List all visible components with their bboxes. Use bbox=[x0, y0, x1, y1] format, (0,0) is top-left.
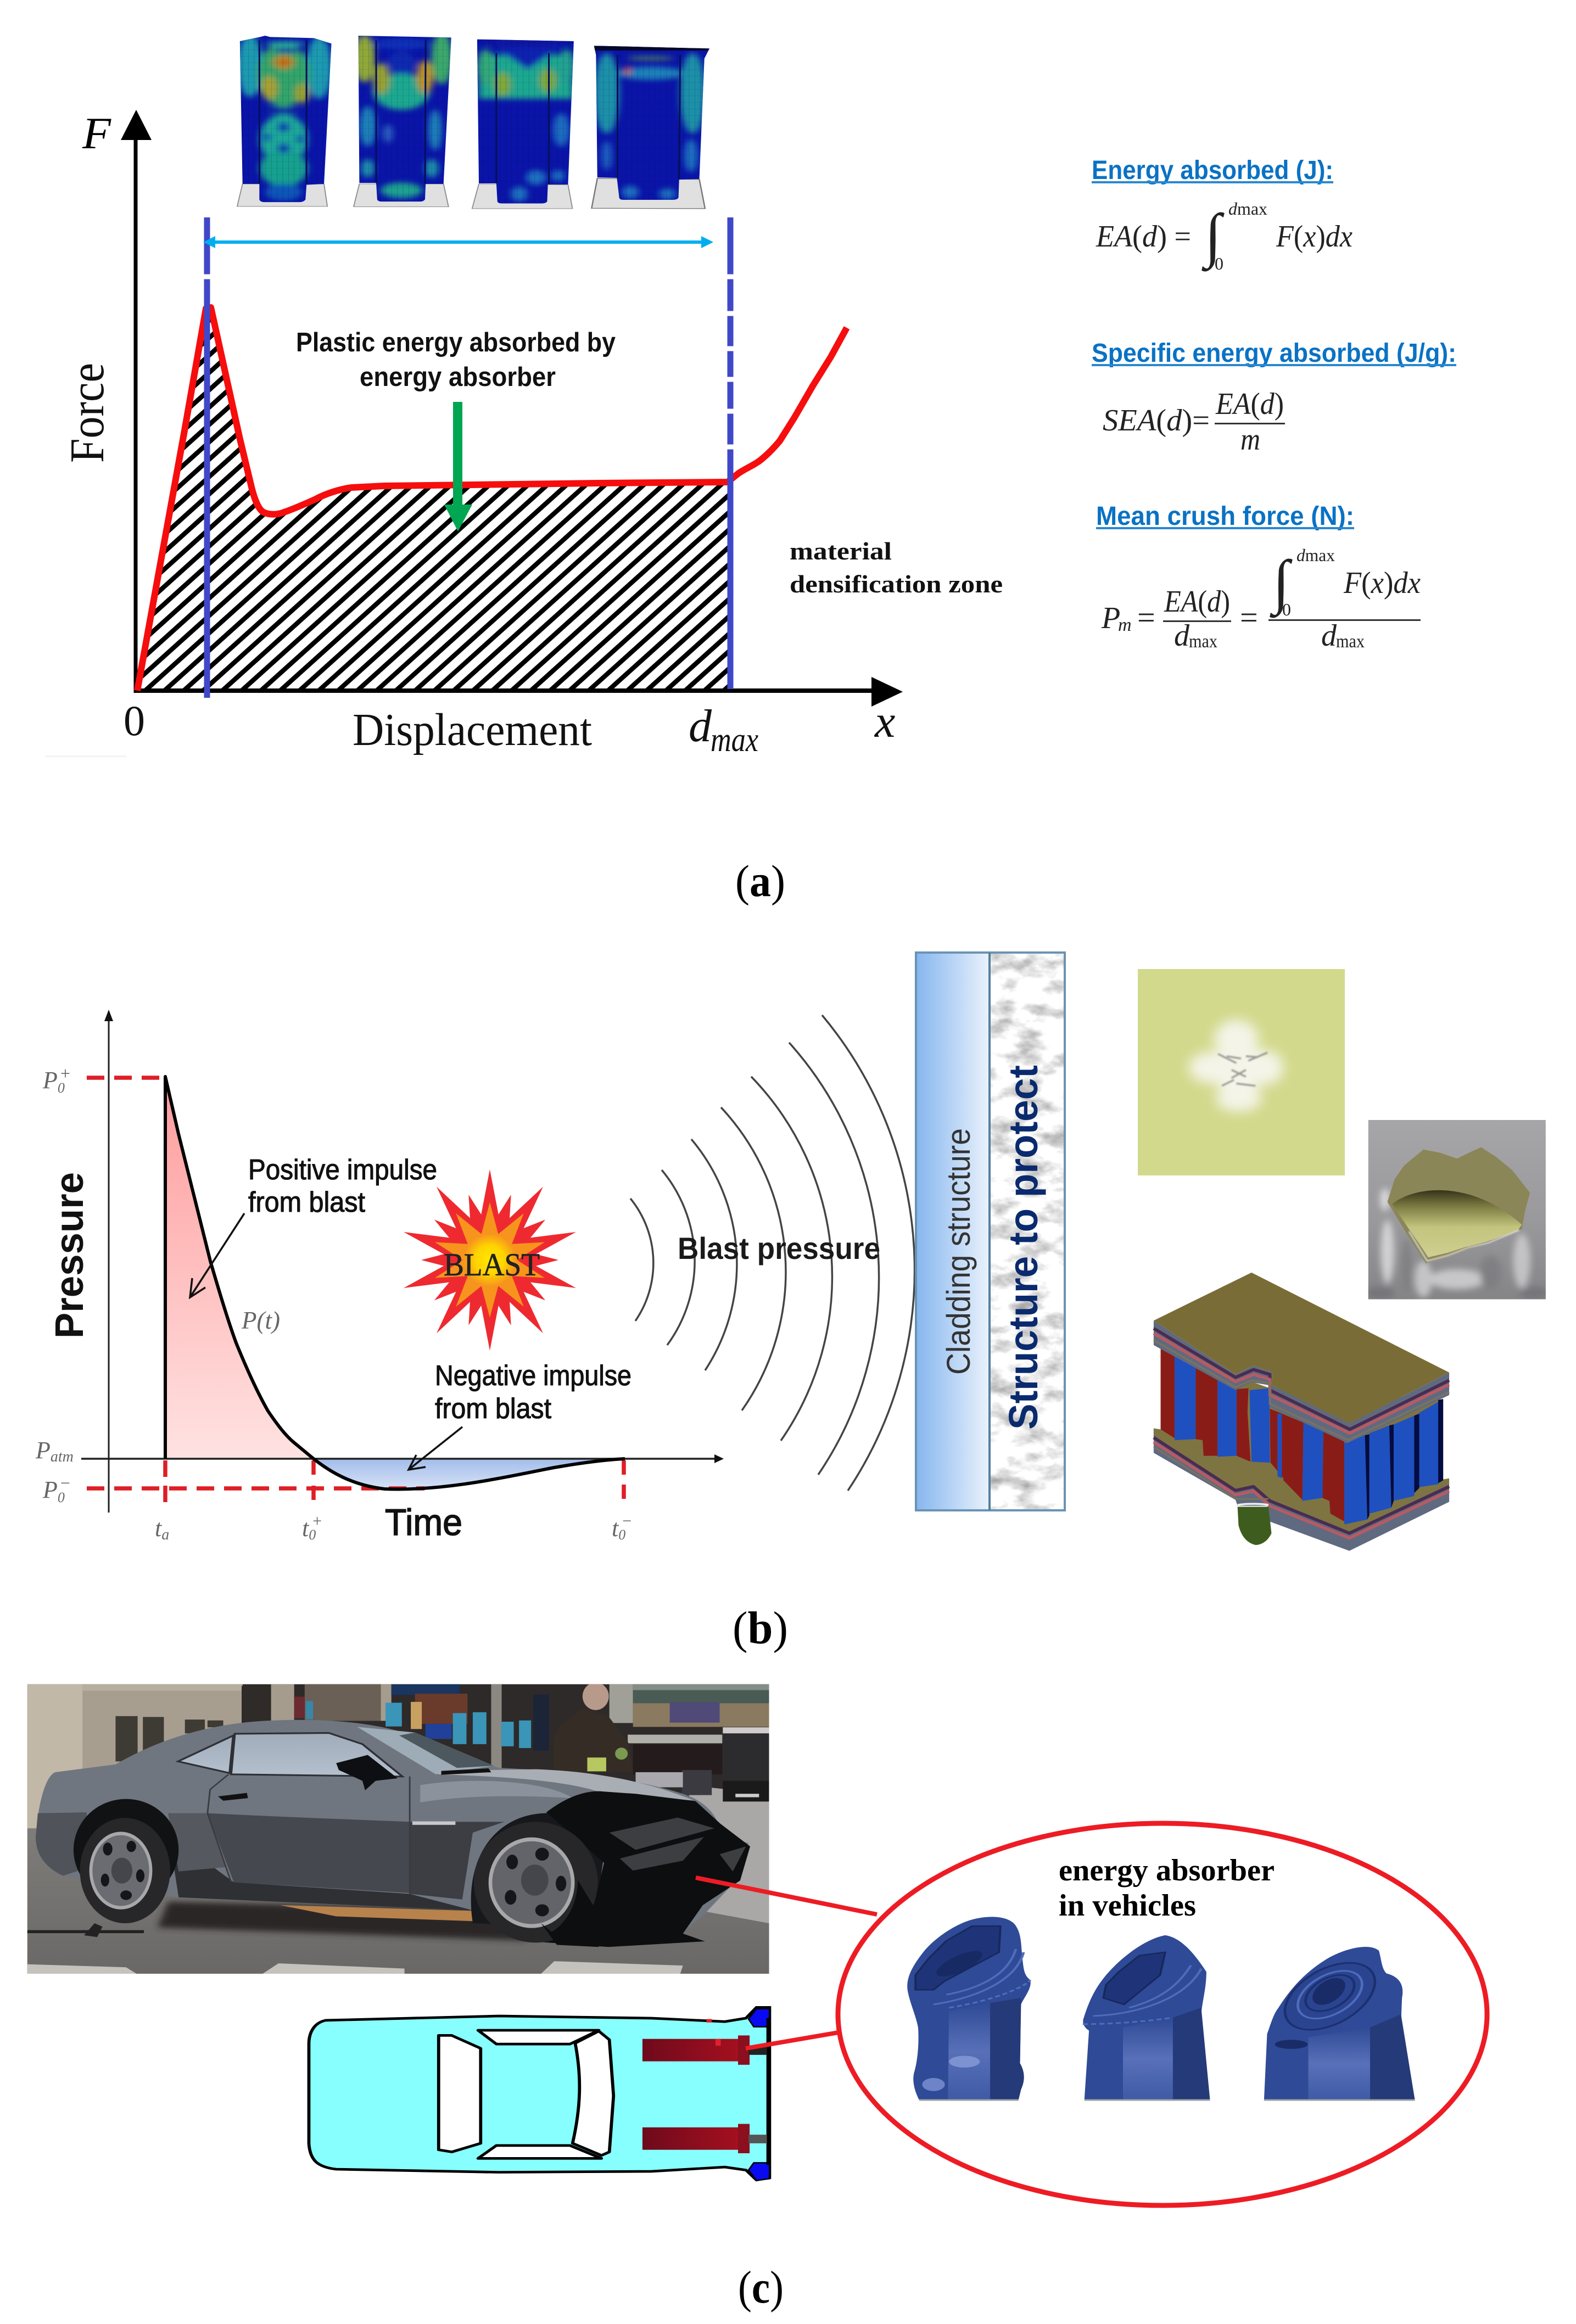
tube 4 bbox=[590, 44, 714, 209]
shadow and reflection bbox=[158, 1902, 526, 1940]
rear wheel bbox=[80, 1818, 170, 1923]
axis label dmax: d bbox=[689, 701, 712, 752]
label BLAST: BLAST bbox=[444, 1247, 540, 1283]
x axis with arrow bbox=[134, 677, 903, 707]
icon: blast star bbox=[400, 1169, 580, 1351]
panel: formulas bbox=[1092, 156, 1456, 653]
city background bbox=[385, 1684, 769, 1774]
time labels bbox=[155, 1512, 632, 1543]
annotation: positive impulse: Positive impulse bbox=[248, 1154, 437, 1186]
wheel arches bbox=[74, 1799, 178, 1901]
faint scan line bbox=[45, 755, 126, 757]
pressure labels: + bbox=[59, 1063, 71, 1083]
formula: mean crush force bbox=[1096, 502, 1421, 653]
zoom ellipse bbox=[838, 1823, 1487, 2205]
car top view diagram bbox=[309, 2007, 770, 2180]
roof bbox=[1154, 1273, 1449, 1424]
absorber 3 bbox=[1264, 1947, 1415, 2100]
road bbox=[27, 1828, 769, 1974]
formula: specific energy absorbed: Specific energy absorbed (J/g): bbox=[1092, 339, 1456, 368]
arrow: negative impulse bbox=[409, 1427, 462, 1470]
axis label dmax: max bbox=[711, 721, 758, 759]
pressure axis bbox=[104, 1010, 113, 1513]
tube 2 bbox=[354, 33, 455, 207]
label: cladding structure: Cladding structure bbox=[940, 1128, 977, 1375]
panel: force-displacement chart (a) bbox=[45, 33, 1003, 759]
photo: impacted plate bbox=[1138, 969, 1345, 1175]
annotation: plastic energy: Plastic energy absorbed by bbox=[296, 328, 616, 357]
formula: mean crush force: = bbox=[1137, 600, 1155, 635]
formula: mean crush force: ∫ bbox=[1270, 548, 1293, 618]
red dashed reference lines bbox=[87, 1078, 624, 1509]
force-displacement curve bbox=[137, 307, 847, 691]
annotation: plastic energy bbox=[296, 328, 616, 392]
label: energy absorber in vehicles bbox=[1059, 1853, 1275, 1923]
axis label dmax bbox=[689, 701, 758, 759]
blast pressure wave arcs bbox=[630, 1015, 915, 1491]
absorber 1 bbox=[907, 1917, 1031, 2100]
backing behind walls bbox=[1154, 1349, 1443, 1537]
axis tick 0: 0 bbox=[124, 697, 145, 744]
annotation: material densification zone: densification zone bbox=[790, 570, 1003, 598]
time labels: t bbox=[302, 1515, 309, 1542]
formula: specific energy absorbed: EA(d) bbox=[1215, 387, 1284, 421]
time labels: a bbox=[161, 1526, 169, 1543]
door seams bbox=[208, 1774, 410, 1894]
axis label x: x bbox=[874, 696, 895, 747]
windows bbox=[178, 1727, 494, 1801]
curve label P(t): P(t) bbox=[241, 1306, 280, 1334]
time labels: t bbox=[155, 1515, 161, 1542]
tube 3 bbox=[472, 37, 580, 209]
torn bumper over wheel bbox=[541, 1880, 599, 1947]
formula: mean crush force: d bbox=[1174, 619, 1190, 653]
formula: mean crush force: Mean crush force (N): bbox=[1096, 502, 1354, 531]
pressure labels: − bbox=[59, 1473, 71, 1493]
photo: torn metal plate bbox=[1366, 1120, 1548, 1300]
formula: energy absorbed: EA(d) = bbox=[1096, 220, 1191, 254]
y axis with arrow bbox=[121, 110, 152, 693]
positive impulse area bbox=[165, 1078, 314, 1459]
formula: mean crush force: dmax bbox=[1296, 545, 1335, 565]
photo: crashed car bbox=[27, 1682, 769, 1974]
energy absorbers bbox=[642, 2019, 767, 2153]
formula: mean crush force: P bbox=[1101, 601, 1120, 635]
windows bbox=[439, 2030, 613, 2158]
front wheel bbox=[474, 1822, 598, 1942]
formula: specific energy absorbed: m bbox=[1240, 423, 1260, 457]
axis label Time: Time bbox=[385, 1502, 462, 1543]
FE model of sandwich structure bbox=[1154, 1273, 1449, 1551]
dark lower panels bbox=[36, 1812, 504, 1910]
time labels: + bbox=[311, 1512, 322, 1530]
pressure labels: P bbox=[43, 1476, 58, 1503]
pressure-time curve bbox=[165, 1077, 625, 1489]
formula: mean crush force: max bbox=[1189, 631, 1217, 652]
formula: energy absorbed: Energy absorbed (J): bbox=[1092, 156, 1333, 185]
pressure labels bbox=[35, 1063, 74, 1505]
formula: energy absorbed bbox=[1092, 156, 1353, 273]
pressure labels: 0 bbox=[58, 1489, 65, 1505]
upper face sheet bands bbox=[1154, 1320, 1449, 1443]
lower slab and floor bbox=[1154, 1429, 1449, 1551]
body bbox=[309, 2007, 769, 2180]
crushed tube simulation images bbox=[233, 33, 714, 209]
pressure labels: atm bbox=[51, 1448, 74, 1465]
projectile bbox=[1238, 1504, 1271, 1545]
formula: mean crush force: 0 bbox=[1282, 600, 1291, 619]
wall panels bbox=[1161, 1349, 1344, 1521]
pressure labels: P bbox=[36, 1437, 51, 1464]
formula: energy absorbed: ∫ bbox=[1201, 201, 1225, 272]
caption (a): (a) bbox=[735, 856, 785, 906]
time labels: 0 bbox=[618, 1527, 625, 1543]
formula: specific energy absorbed bbox=[1092, 339, 1456, 457]
formula: energy absorbed: F(x)dx bbox=[1276, 220, 1353, 254]
car body bbox=[36, 1720, 748, 1945]
time labels: t bbox=[612, 1515, 618, 1542]
cladding structure panel bbox=[916, 953, 1065, 1510]
truck and traffic bbox=[635, 1727, 769, 1801]
axis label Pressure: Pressure bbox=[48, 1172, 92, 1339]
axis label F: F bbox=[82, 108, 111, 158]
label: energy absorber in vehicles: energy absorber bbox=[1059, 1853, 1275, 1888]
axis label Force: Force bbox=[61, 363, 114, 463]
green arrow bbox=[444, 402, 472, 531]
bumper corners bbox=[748, 2009, 769, 2180]
panel: vehicle crash (c) bbox=[27, 1682, 1487, 2205]
absorber 2 bbox=[1083, 1935, 1210, 2100]
annotation: plastic energy: energy absorber bbox=[360, 362, 556, 392]
hood and fender highlight bbox=[412, 1768, 694, 1825]
annotation: material densification zone: material bbox=[790, 537, 892, 565]
annotation: negative impulse: Negative impulse bbox=[435, 1360, 631, 1392]
formula: mean crush force: max bbox=[1336, 631, 1365, 652]
formula: mean crush force: EA(d) bbox=[1164, 585, 1230, 619]
formula: mean crush force: d bbox=[1321, 619, 1337, 653]
formula: mean crush force: m bbox=[1118, 615, 1132, 635]
caption (b): (b) bbox=[733, 1603, 788, 1654]
annotation: negative impulse bbox=[435, 1360, 631, 1425]
dashed limit lines bbox=[203, 217, 734, 698]
crushed absorbers bbox=[907, 1917, 1415, 2101]
crosswalk bbox=[27, 1961, 683, 1974]
formula: energy absorbed: 0 bbox=[1215, 254, 1223, 273]
label: structure to protect: Structure to protect bbox=[1001, 1065, 1046, 1430]
label Blast pressure: Blast pressure bbox=[678, 1231, 880, 1265]
annotation: negative impulse: from blast bbox=[435, 1393, 552, 1425]
caption (c): (c) bbox=[738, 2262, 784, 2313]
firefighter bbox=[554, 1682, 633, 1772]
formula: mean crush force: = bbox=[1240, 600, 1258, 635]
panel: blast pressure chart (b) bbox=[35, 953, 1548, 1551]
time axis bbox=[81, 1454, 724, 1463]
formula: specific energy absorbed: SEA(d)= bbox=[1103, 404, 1210, 438]
formula: mean crush force: F(x)dx bbox=[1343, 566, 1421, 600]
building left bbox=[27, 1684, 392, 1835]
arrow: positive impulse bbox=[190, 1213, 244, 1297]
pressure labels: 0 bbox=[58, 1080, 65, 1096]
damaged front bbox=[531, 1791, 750, 1947]
annotation: positive impulse: from blast bbox=[248, 1186, 366, 1218]
label: energy absorber in vehicles: in vehicles bbox=[1059, 1889, 1196, 1923]
annotation: positive impulse bbox=[248, 1154, 437, 1218]
time labels: 0 bbox=[309, 1527, 316, 1543]
cyan double arrow bbox=[203, 236, 713, 248]
negative impulse area bbox=[314, 1459, 625, 1489]
formula: energy absorbed: dmax bbox=[1228, 199, 1267, 219]
pressure labels: P bbox=[43, 1067, 58, 1094]
tube 1 bbox=[236, 36, 332, 206]
axis label Displacement: Displacement bbox=[353, 704, 592, 755]
annotation: material densification zone bbox=[790, 537, 1003, 598]
red pointer lines bbox=[696, 1878, 877, 2048]
time labels: − bbox=[621, 1512, 632, 1530]
hatched plastic energy area bbox=[136, 306, 730, 691]
